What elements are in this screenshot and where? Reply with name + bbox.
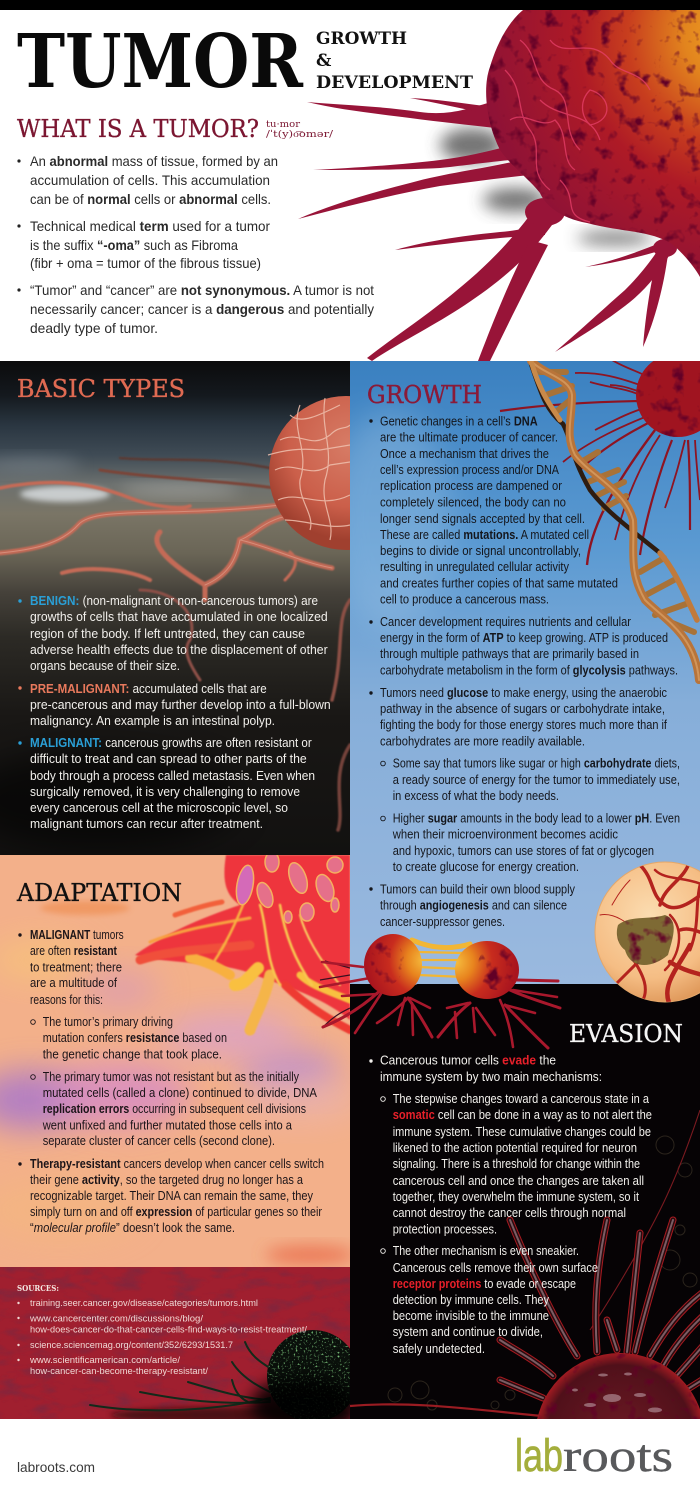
top black bar [0,0,700,10]
text block: definition bullets: is the suffix “-oma” such as Fibroma [30,238,238,253]
evasion text: mechanism one: immune system. These cumulative changes could be [393,1125,651,1139]
malignant text: surgically removed, it is very challenging to remove [30,785,300,799]
adaptation text: resistance: The tumor’s primary driving [43,1015,173,1029]
pronunciation [266,120,334,140]
growth text: glucose: carbohydrates are more readily available. [380,735,585,749]
malignant text: malignant tumors can recur after treatment. [30,817,263,831]
growth text: DNA mutations: cell to produce a cancerous mass. [380,593,549,607]
pronunciation: /ˈt(y)o͞omər/ [266,129,334,140]
adaptation text: therapy resistance: Therapy-resistant cancers develop when cancer cells switch [30,1157,324,1171]
basic types background image [0,361,350,855]
sources background with green cell [0,1267,350,1419]
evasion text: mechanism two: system and continue to divide, [393,1325,543,1339]
benign text: adverse health effects due to the displacement of other [30,643,328,657]
growth text: glucose: fighting the body for those energy stores much more than if [380,718,667,732]
benign text: region of the body. If left untreated, they can cause [30,627,305,641]
blurred red tumor [135,855,350,1020]
heading: what is a tumor: WHAT IS A TUMOR? [17,115,259,143]
evasion text: mechanism one: signaling. There is a threshold for change within the [393,1157,640,1171]
sources heading: SOURCES: [17,1284,59,1294]
growth text: angiogenesis [369,883,576,929]
logo: labroots: lab [515,1430,563,1481]
sources list: how-cancer-can-become-therapy-resistant/ [30,1366,208,1376]
benign text [18,594,328,673]
growth text: ATP: Cancer development requires nutrients and cellular [380,615,631,629]
subtitle: GROWTH [316,29,407,49]
evasion text: mechanism one: cancerous cell and once the changes are taken all [393,1174,644,1188]
evasion text: mechanism two: Cancerous cells remove their own surface [393,1261,598,1275]
adaptation text: therapy resistance: their gene activity, so the targeted drug no longer has a [30,1173,303,1187]
benign text: BENIGN: (non-malignant or non-cancerous tumors) are [30,594,318,608]
pre-malignant text: malignancy. An example is an intestinal polyp. [30,714,275,728]
malignant text: every cancerous cell at the microscopic level, so [30,801,288,815]
malignant text [18,736,315,831]
text block: definition bullets: can be of normal cells or abnormal cells. [30,192,271,207]
evasion text: mechanism one: cannot destroy the cancer cells through normal [393,1206,626,1220]
evasion text: mechanism one: somatic cell can be done in a way as to not alert the [393,1108,652,1122]
growth text: ATP: energy in the form of ATP to keep growing. ATP is produced [380,631,668,645]
adaptation text: resistance: the genetic change that took place. [43,1048,222,1062]
sources list: www.cancercenter.com/discussions/blog/ [29,1313,203,1323]
growth text: glucose: and hypoxic, tumors can use stores of fat or glycogen [393,844,654,858]
illustration: dividing cells [320,934,560,1048]
panel: basic types [0,361,350,855]
growth text: angiogenesis: Tumors can build their own blood supply [380,883,576,897]
growth text: angiogenesis: cancer-suppressor genes. [380,915,505,929]
growth text: glucose: pathway in the absence of sugars or carbohydrate intake, [380,702,665,716]
text block: definition bullets: accumulation of cells. This accumulation [30,173,270,188]
growth text: ATP [369,615,678,678]
sources list [17,1298,307,1376]
growth text: DNA mutations: replication process are dampened or [380,479,562,493]
adaptation text: resistance: mutation confers resistance based on [43,1031,227,1045]
subtitle: DEVELOPMENT [316,73,473,93]
growth text: DNA mutations [369,415,618,607]
panel: sources [0,1267,350,1419]
website: labroots.com [17,1459,95,1475]
text block: definition bullets: (fibr + oma = tumor of the fibrous tissue) [30,256,261,271]
main title: TUMOR [17,19,303,105]
evasion text: mechanism two: receptor proteins to evade or escape [393,1277,576,1291]
adaptation text: resistance: to treatment; there [30,961,122,975]
pre-malignant text [18,682,331,728]
adaptation text: therapy resistance [18,1157,324,1235]
evasion text: mechanism one [369,1054,652,1237]
growth text: DNA mutations: are the ultimate producer of cancer. [380,431,558,445]
adaptation text: therapy resistance: “molecular profile” doesn’t look the same. [30,1221,235,1235]
text block: definition bullets: An abnormal mass of tissue, formed by an [30,154,278,169]
illustration: tumor angiogenesis circle [595,860,700,1005]
adaptation text: resistance: are a multitude of [30,976,117,990]
text block: definition bullets [17,154,374,336]
pronunciation: tu·mor [266,120,301,130]
malignant text: MALIGNANT: cancerous growths are often resistant or [30,736,312,750]
text block: definition bullets: “Tumor” and “cancer” are not synonymous. A tumor is not [30,283,374,298]
growth text: DNA mutations: Genetic changes in a cell’s DNA [380,415,538,429]
adaptation text: resistance: separate cluster of cancer cells (second clone). [43,1134,275,1148]
growth text: DNA mutations: Once a mechanism that drives the [380,447,549,461]
evasion text: mechanism one: protection processes. [393,1223,497,1237]
malignant text: body through a process called metastasis. Even when [30,769,315,783]
growth text: angiogenesis: through angiogenesis and can silence [380,899,567,913]
growth text: DNA mutations: cell’s expression process and/or DNA [380,463,560,477]
panel: evasion [350,984,700,1419]
adaptation text: resistance: MALIGNANT tumors [30,928,124,942]
sources list: training.seer.cancer.gov/disease/categories/tumors.html [30,1298,258,1308]
logo: labroots [515,1430,673,1481]
growth text: glucose: Some say that tumors like sugar or high carbohydrate diets, [393,757,680,771]
growth heading: GROWTH [367,381,482,409]
basic types heading: BASIC TYPES [17,375,185,403]
sources list: science.sciencemag.org/content/352/6293/1531.7 [30,1340,233,1350]
growth text: DNA mutations: These are called mutations. A mutated cell [380,528,589,542]
adaptation text: resistance: are often resistant [30,944,118,958]
growth text: ATP: carbohydrate metabolism in the form of glycolysis pathways. [380,664,678,678]
panel: header and what is a tumor [0,10,700,361]
evasion text: mechanism one: immune system by two main mechanisms: [380,1070,602,1084]
adaptation text: resistance: went unfixed and further mutated those cells into a [42,1119,292,1133]
growth text: ATP: through multiple pathways that are primarily based in [380,647,639,661]
growth text: DNA mutations: resulting in unregulated cellular activity [380,560,570,574]
evasion text: mechanism one: together, they overwhelm the immune system, so it [393,1190,639,1204]
growth text: DNA mutations: longer send signals accepted by that cell. [380,512,585,526]
pre-malignant text: pre-cancerous and may further develop into a full-blown [30,698,331,712]
panel: growth [330,353,700,985]
adaptation text: therapy resistance: simply turn on and off expression of particular genes so their [30,1205,322,1219]
growth text: glucose [369,686,680,874]
evasion text: mechanism one: The stepwise changes toward a cancerous state in a [393,1092,649,1106]
growth text: glucose: Tumors need glucose to make energy, using the anaerobic [380,686,667,700]
evasion text: mechanism one: Cancerous tumor cells evade the [380,1054,556,1068]
illustration: red tumor with spikes [298,10,700,361]
sources list: www.scientificamerican.com/article/ [29,1355,180,1365]
adaptation heading: ADAPTATION [16,879,182,907]
growth text: glucose: in excess of what the body needs. [393,789,559,803]
evasion background with red cell [350,984,700,1419]
logo: labroots: roots [563,1430,673,1481]
sources list: how-does-cancer-do-that-cancer-cells-find-ways-to-resist-treatment/ [30,1324,307,1334]
text block: definition bullets: Technical medical term used for a tumor [30,219,270,234]
panel: adaptation [0,852,360,1267]
adaptation background [0,852,360,1267]
adaptation text: resistance [18,928,318,1148]
pre-malignant text: PRE-MALIGNANT: accumulated cells that are [30,682,267,696]
adaptation text: resistance: replication errors occurring in subsequent cell divisions [43,1102,306,1116]
evasion text: mechanism two: The other mechanism is even sneakier. [393,1244,579,1258]
growth text: glucose: Higher sugar amounts in the body lead to a lower pH. Even [393,812,680,826]
growth text: glucose: when their microenvironment becomes acidic [392,828,618,842]
growth text: DNA mutations: completely silenced, the body can no [380,496,566,510]
adaptation text: resistance: reasons for this: [30,993,103,1007]
growth text: DNA mutations: and creates further copies of that same mutated [380,577,618,591]
panel: footer [0,1419,700,1489]
malignant text: difficult to treat and can spread to other parts of the [30,752,307,766]
footer background [0,1419,700,1489]
benign text: growths of cells that have accumulated in one localized [30,610,328,624]
spikes of blue panel cell [500,360,700,565]
evasion heading: EVASION [569,1020,683,1048]
text block: definition bullets: deadly type of tumor. [30,321,158,336]
adaptation text: therapy resistance: recognizable target. Their DNA can remain the same, they [30,1189,314,1203]
growth background with red cell and DNA helix [330,353,700,985]
background white [0,10,700,361]
text block: definition bullets: necessarily cancer; cancer is a dangerous and potentially [30,302,374,317]
evasion text: mechanism one: likened to the action potential required for neuron [393,1141,637,1155]
evasion text: mechanism two: safely undetected. [393,1342,485,1356]
DNA helix [530,361,699,680]
evasion text: mechanism two: detection by immune cells. They [393,1293,550,1307]
adaptation text: resistance: mutated cells (called a clone) continued to divide, DNA [43,1086,318,1100]
benign text: organs because of their size. [30,659,180,673]
adaptation text: resistance: The primary tumor was not resistant but as the initially [43,1070,300,1084]
evasion text: mechanism two: become invisible to the immune [393,1309,549,1323]
growth text: glucose: to create glucose for energy creation. [393,860,579,874]
subtitle: & [316,51,332,71]
evasion text: mechanism two [381,1244,598,1356]
growth text: DNA mutations: begins to divide or signal uncontrollably, [380,544,581,558]
subtitle [316,29,473,93]
